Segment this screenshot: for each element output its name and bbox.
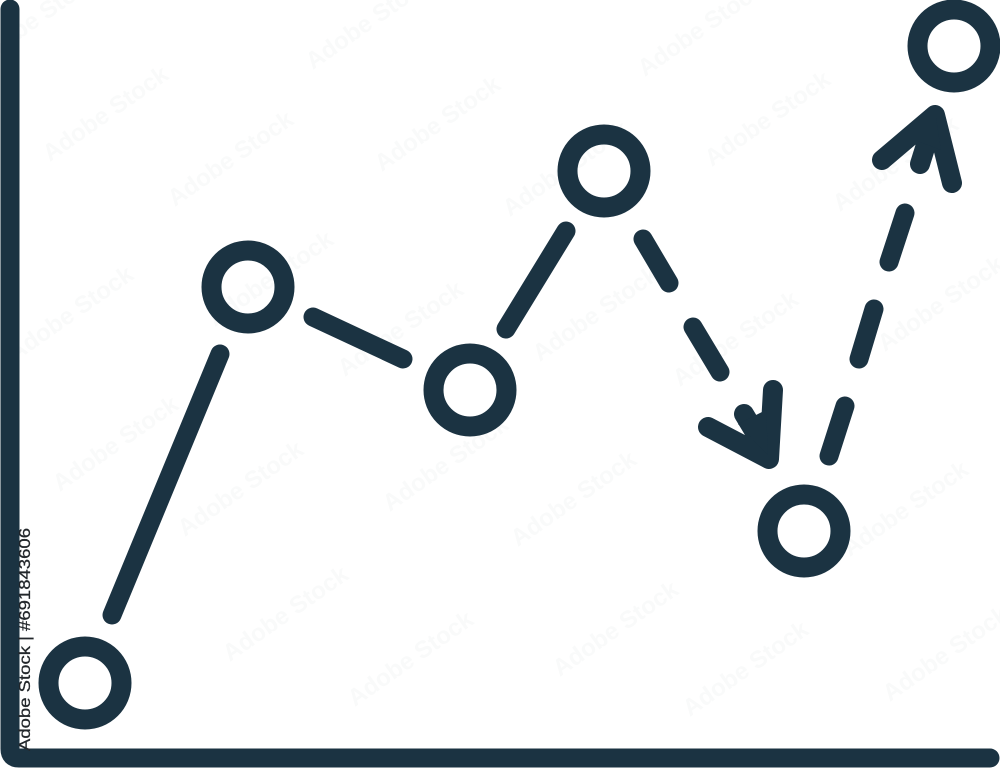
watermark pattern: Adobe Stock	[3, 260, 139, 367]
watermark pattern: Adobe Stock	[203, 225, 339, 332]
dashed line descending	[643, 239, 720, 372]
watermark pattern: Adobe Stock	[378, 410, 514, 517]
watermark pattern: Adobe Stock	[343, 605, 479, 712]
watermark pattern: Adobe Stock	[163, 105, 299, 212]
data point 3	[434, 354, 506, 426]
watermark pattern: Adobe Stock	[173, 435, 309, 542]
watermark pattern: Adobe Stock	[678, 615, 814, 722]
data point 5	[768, 494, 840, 568]
watermark pattern: Adobe Stock	[528, 260, 664, 367]
solid line segments	[112, 231, 566, 615]
watermark pattern: Adobe Stock	[498, 115, 634, 222]
watermark pattern: Adobe Stock	[48, 390, 184, 497]
data point 2	[212, 250, 284, 324]
watermark pattern: Adobe Stock	[700, 65, 836, 172]
data point 4	[568, 134, 640, 208]
data point 6	[918, 10, 990, 82]
watermark pattern: Adobe Stock	[506, 445, 642, 552]
watermark pattern: Adobe Stock	[668, 285, 804, 392]
data point 1	[48, 646, 122, 720]
watermark pattern: Adobe Stock	[333, 275, 469, 382]
watermark pattern: Adobe Stock	[218, 560, 354, 667]
watermark pattern: Adobe Stock	[548, 575, 684, 682]
arrow: upward arrowhead	[882, 115, 952, 183]
watermark pattern: Adobe Stock	[38, 60, 174, 167]
watermark pattern: Adobe Stock	[838, 455, 974, 562]
arrow: downward arrowhead	[708, 390, 773, 459]
watermark pattern: Adobe Stock	[370, 70, 506, 177]
watermark pattern: Adobe Stock	[828, 110, 964, 217]
stock credit text: Adobe Stock | #691843606	[17, 528, 34, 751]
dashed line ascending	[829, 213, 905, 456]
